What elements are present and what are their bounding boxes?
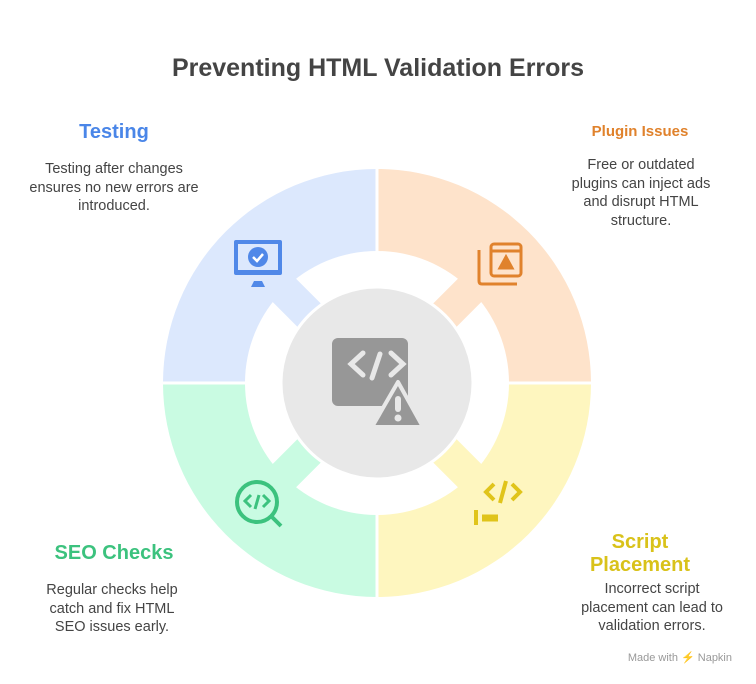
text: SEO Checks: Regular checks help catch and fix HTML SEO issues early.: [46, 582, 178, 635]
quadrant: testing: [163, 169, 377, 383]
heading: Plugin Issues: Plugin Issues: [592, 123, 688, 140]
icon: browser warning: [479, 244, 521, 284]
icon: code warning: [332, 338, 423, 427]
quadrant: script: [377, 383, 591, 597]
title: Preventing HTML Validation Errors: [172, 54, 584, 82]
text: Plugin Issues: Free or outdated plugins can inject ads and disrupt HTML structure.: [572, 157, 710, 228]
heading: SEO Checks: SEO Checks: [55, 542, 173, 564]
quadrant: plugin: [377, 169, 591, 383]
heading: Script Placement: Script Placement: [590, 531, 690, 576]
center circle: [281, 287, 473, 479]
icon: monitor check: [234, 240, 282, 287]
icon: code magnifier: [237, 482, 281, 526]
icon: script code: [476, 481, 520, 525]
text: Testing: Testing after changes ensures no new errors are introduced.: [29, 161, 199, 214]
footer: Made with ⚡ Napkin: [628, 652, 732, 664]
text: Script Placement: Incorrect script placement can lead to validation errors.: [581, 581, 723, 634]
heading: Testing: Testing: [79, 121, 149, 143]
quadrant: seo: [163, 383, 377, 597]
